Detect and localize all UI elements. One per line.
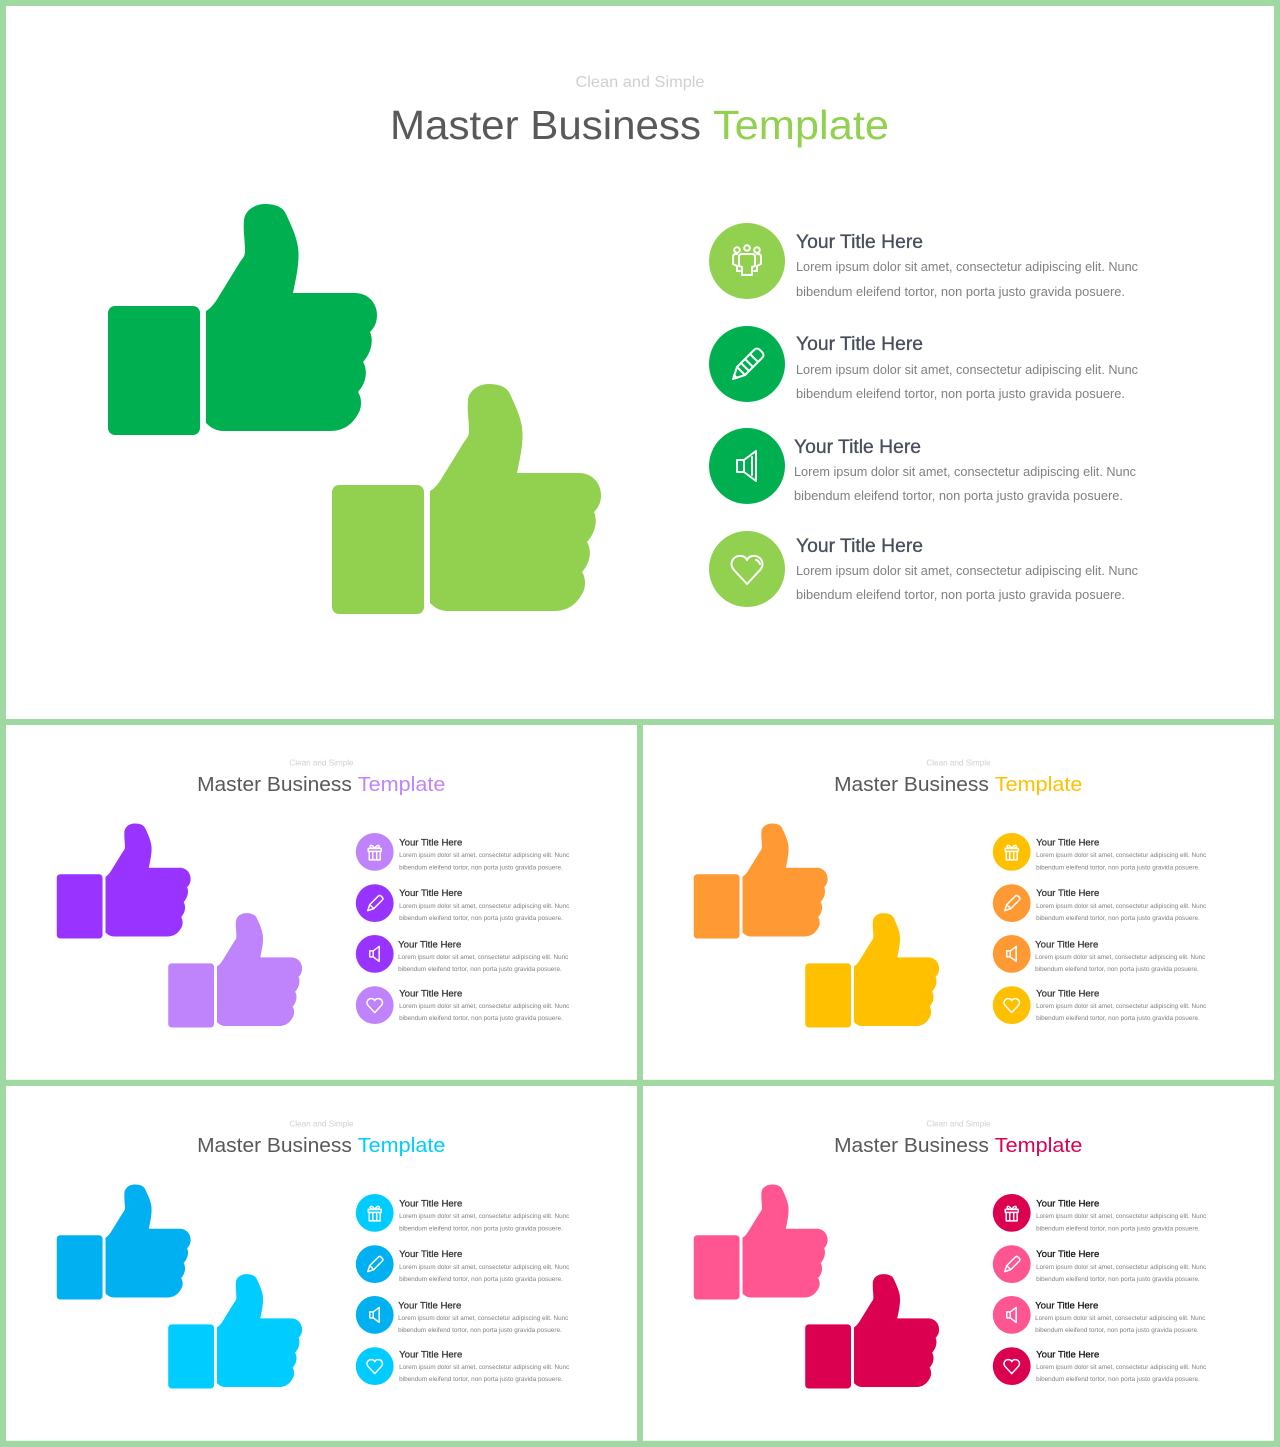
item 3: Lorem ipsum dolor sit amet, consectetur adipiscing elit. Nunc <box>398 1315 568 1322</box>
panel: purple slide <box>6 725 637 1080</box>
item 3: Your Title Here <box>1035 1300 1098 1311</box>
item 3 <box>993 935 1205 973</box>
icon: cyan thumbs up <box>168 1274 302 1389</box>
item 1: Your Title Here <box>796 232 923 253</box>
item 4 <box>356 986 569 1024</box>
heading: title <box>390 102 889 148</box>
item 4: Lorem ipsum dolor sit amet, consectetur adipiscing elit. Nunc <box>399 1003 569 1010</box>
item 1: Your Title Here <box>1036 1198 1099 1209</box>
item 2 <box>709 326 1138 402</box>
item 4: bibendum eleifend tortor, non porta justo gravida posuere. <box>1036 1015 1200 1022</box>
item 4: bibendum eleifend tortor, non porta justo gravida posuere. <box>1036 1376 1200 1383</box>
item 4: Your Title Here <box>399 1350 462 1361</box>
item 3: Lorem ipsum dolor sit amet, consectetur adipiscing elit. Nunc <box>1035 1315 1205 1322</box>
item 1 <box>993 1194 1206 1232</box>
item 2: Lorem ipsum dolor sit amet, consectetur adipiscing elit. Nunc <box>399 903 569 910</box>
item 2: bibendum eleifend tortor, non porta justo gravida posuere. <box>1036 1276 1200 1283</box>
item 3: Lorem ipsum dolor sit amet, consectetur adipiscing elit. Nunc <box>794 465 1136 479</box>
item 2: bibendum eleifend tortor, non porta justo gravida posuere. <box>399 915 563 922</box>
item 4: Your Title Here <box>796 536 923 557</box>
item 2 <box>993 1245 1206 1283</box>
heading: supertitle: Clean and Simple <box>926 1119 991 1128</box>
item 4: Your Title Here <box>1036 1350 1099 1361</box>
item 4 <box>993 986 1206 1024</box>
item 1 <box>356 833 569 871</box>
heading: supertitle: Clean and Simple <box>576 74 705 91</box>
heading: title: Master Business <box>834 1135 989 1157</box>
panel: main slide (green) <box>6 6 1274 719</box>
item 3: bibendum eleifend tortor, non porta justo gravida posuere. <box>1035 1327 1199 1334</box>
panel: orange slide <box>643 725 1274 1080</box>
item 1: bibendum eleifend tortor, non porta justo gravida posuere. <box>1036 864 1200 871</box>
item 1: Your Title Here <box>399 837 462 848</box>
heading: title <box>834 774 1082 796</box>
item 2: Your Title Here <box>1036 888 1099 899</box>
item 3: bibendum eleifend tortor, non porta justo gravida posuere. <box>398 1327 562 1334</box>
item 2: bibendum eleifend tortor, non porta justo gravida posuere. <box>1036 915 1200 922</box>
icon: blue thumbs up <box>57 1185 191 1299</box>
item 1: Lorem ipsum dolor sit amet, consectetur adipiscing elit. Nunc <box>399 1213 569 1220</box>
panel: pink slide <box>643 1086 1274 1441</box>
heading: title <box>197 1135 445 1157</box>
item 1 <box>709 223 1138 299</box>
heading: title: Template <box>995 1135 1082 1157</box>
item 3: Your Title Here <box>1035 939 1098 950</box>
item 3: bibendum eleifend tortor, non porta justo gravida posuere. <box>1035 966 1199 973</box>
icon: orange thumbs up <box>694 824 828 938</box>
item 2: Lorem ipsum dolor sit amet, consectetur adipiscing elit. Nunc <box>399 1264 569 1271</box>
item 1: bibendum eleifend tortor, non porta justo gravida posuere. <box>796 285 1125 299</box>
item 1: Your Title Here <box>399 1198 462 1209</box>
item 3: Your Title Here <box>398 1300 461 1311</box>
icon: yellow thumbs up <box>805 913 939 1028</box>
item 2: bibendum eleifend tortor, non porta justo gravida posuere. <box>399 1276 563 1283</box>
item 2: Lorem ipsum dolor sit amet, consectetur adipiscing elit. Nunc <box>1036 1264 1206 1271</box>
heading: title: Master Business <box>197 774 352 796</box>
item 3 <box>356 1296 568 1334</box>
item 2: Your Title Here <box>399 1249 462 1260</box>
item 3 <box>356 935 568 973</box>
item 2: Your Title Here <box>796 334 923 355</box>
item 4 <box>709 531 1138 607</box>
item 1 <box>993 833 1206 871</box>
item 4 <box>993 1347 1206 1385</box>
item 4: Your Title Here <box>399 989 462 1000</box>
icon: crimson thumbs up <box>805 1274 939 1389</box>
item 4: bibendum eleifend tortor, non porta justo gravida posuere. <box>796 588 1125 602</box>
heading: supertitle: Clean and Simple <box>926 758 991 767</box>
heading: supertitle: Clean and Simple <box>289 1119 354 1128</box>
item 1: Lorem ipsum dolor sit amet, consectetur adipiscing elit. Nunc <box>1036 852 1206 859</box>
icon: light purple thumbs up <box>168 913 302 1028</box>
item 1: Your Title Here <box>1036 837 1099 848</box>
heading: title: Template <box>713 102 889 148</box>
item 3: Lorem ipsum dolor sit amet, consectetur adipiscing elit. Nunc <box>1035 954 1205 961</box>
item 3: Your Title Here <box>398 939 461 950</box>
panel: blue slide <box>6 1086 637 1441</box>
item 4: Your Title Here <box>1036 989 1099 1000</box>
item 2: Lorem ipsum dolor sit amet, consectetur adipiscing elit. Nunc <box>1036 903 1206 910</box>
item 4 <box>356 1347 569 1385</box>
item 2 <box>993 884 1206 922</box>
item 2 <box>356 1245 569 1283</box>
item 2: Lorem ipsum dolor sit amet, consectetur adipiscing elit. Nunc <box>796 363 1138 377</box>
heading: title: Template <box>358 1135 445 1157</box>
item 3: bibendum eleifend tortor, non porta justo gravida posuere. <box>398 966 562 973</box>
item 4: bibendum eleifend tortor, non porta justo gravida posuere. <box>399 1015 563 1022</box>
heading: title <box>834 1135 1082 1157</box>
item 1: Lorem ipsum dolor sit amet, consectetur adipiscing elit. Nunc <box>1036 1213 1206 1220</box>
item 1 <box>356 1194 569 1232</box>
item 3 <box>993 1296 1205 1334</box>
item 4: Lorem ipsum dolor sit amet, consectetur adipiscing elit. Nunc <box>1036 1003 1206 1010</box>
heading: supertitle: Clean and Simple <box>289 758 354 767</box>
icon: pink thumbs up <box>694 1185 828 1299</box>
item 4: Lorem ipsum dolor sit amet, consectetur adipiscing elit. Nunc <box>399 1364 569 1371</box>
icon: light green thumbs up <box>332 384 601 614</box>
item 1: bibendum eleifend tortor, non porta justo gravida posuere. <box>399 864 563 871</box>
item 1: Lorem ipsum dolor sit amet, consectetur adipiscing elit. Nunc <box>796 260 1138 274</box>
heading: title <box>197 774 445 796</box>
item 1: Lorem ipsum dolor sit amet, consectetur adipiscing elit. Nunc <box>399 852 569 859</box>
item 3: bibendum eleifend tortor, non porta justo gravida posuere. <box>794 489 1123 503</box>
heading: title: Template <box>995 774 1082 796</box>
item 1: bibendum eleifend tortor, non porta justo gravida posuere. <box>399 1225 563 1232</box>
item 2: Your Title Here <box>1036 1249 1099 1260</box>
icon: dark green thumbs up <box>108 204 377 435</box>
item 3: Lorem ipsum dolor sit amet, consectetur adipiscing elit. Nunc <box>398 954 568 961</box>
item 3: Your Title Here <box>794 437 921 458</box>
item 1: bibendum eleifend tortor, non porta justo gravida posuere. <box>1036 1225 1200 1232</box>
heading: title: Master Business <box>390 102 701 148</box>
item 2: bibendum eleifend tortor, non porta justo gravida posuere. <box>796 387 1125 401</box>
heading: title: Master Business <box>834 774 989 796</box>
item 2 <box>356 884 569 922</box>
icon: purple thumbs up <box>57 824 191 938</box>
item 4: bibendum eleifend tortor, non porta justo gravida posuere. <box>399 1376 563 1383</box>
item 4: Lorem ipsum dolor sit amet, consectetur adipiscing elit. Nunc <box>1036 1364 1206 1371</box>
item 4: Lorem ipsum dolor sit amet, consectetur adipiscing elit. Nunc <box>796 564 1138 578</box>
heading: title: Template <box>358 774 445 796</box>
heading: title: Master Business <box>197 1135 352 1157</box>
item 2: Your Title Here <box>399 888 462 899</box>
item 3 <box>709 428 1136 504</box>
